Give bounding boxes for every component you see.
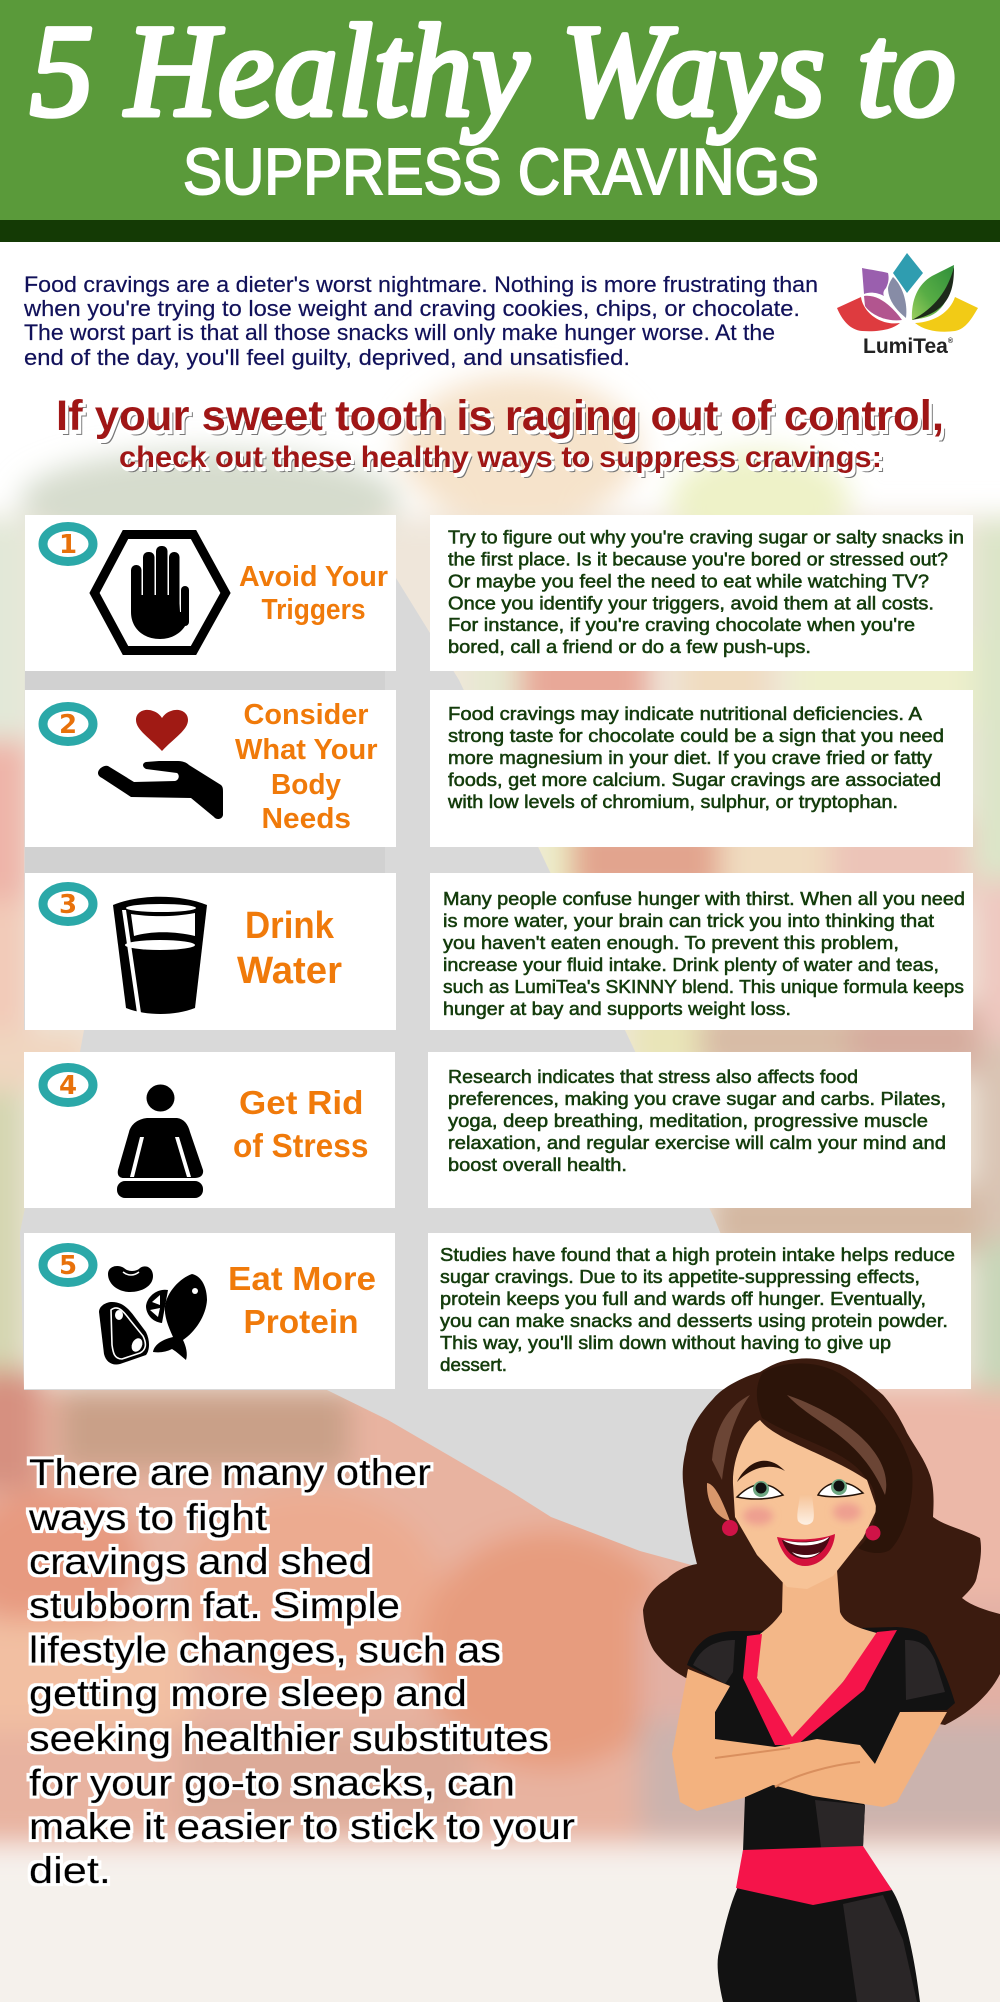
fringe bbox=[757, 1363, 913, 1553]
step 2 body text: with low levels of chromium, sulphur, or tryptophan. bbox=[447, 791, 898, 812]
arms bbox=[672, 1669, 947, 1811]
step 2 body text: more magnesium in your diet. If you crave fried or fatty bbox=[448, 747, 933, 768]
step 4 body text: boost overall health. bbox=[448, 1154, 627, 1175]
hair bbox=[643, 1358, 1000, 1725]
intro text: The worst part is that all those snacks will only make hunger worse. At the bbox=[24, 320, 775, 345]
step 1 number badge bbox=[43, 526, 93, 562]
closing paragraph: There are many other bbox=[29, 1451, 431, 1493]
mouth bbox=[777, 1534, 835, 1566]
step 3 number badge bbox=[43, 886, 93, 922]
closing paragraph: diet. bbox=[29, 1849, 111, 1891]
speech bubble: gray shape behind the cards bbox=[20, 578, 790, 1568]
ear bbox=[707, 1483, 730, 1521]
step 1 body text: Once you identify your triggers, avoid them at all costs. bbox=[448, 592, 934, 614]
step 1 title: Triggers bbox=[262, 594, 366, 626]
step 2 panel bbox=[25, 690, 973, 847]
closing paragraph: ways to fight bbox=[28, 1496, 268, 1538]
step 3 body text: is more water, your brain can trick you into thinking that bbox=[443, 910, 934, 931]
step 4 number badge bbox=[43, 1068, 93, 1102]
step 3 body text: you haven't eaten enough. To prevent this problem, bbox=[443, 932, 899, 953]
step 5 body text: you can make snacks and desserts using protein powder. bbox=[440, 1310, 948, 1331]
cheeks bbox=[743, 1503, 861, 1525]
step 2 body text: Food cravings may indicate nutritional deficiencies. A bbox=[448, 703, 923, 724]
step 4 panel bbox=[24, 1052, 971, 1208]
step 4 title: of Stress bbox=[233, 1127, 368, 1164]
step 2 body text: foods, get more calcium. Sugar cravings are associated bbox=[448, 769, 941, 790]
step 5 body text: This way, you'll slim down without having to give up bbox=[440, 1332, 891, 1353]
step 2 title: What Your bbox=[235, 734, 378, 766]
step 2 body text bbox=[447, 703, 944, 812]
step 4 body text: Research indicates that stress also affects food bbox=[448, 1066, 858, 1087]
step 4 body text: preferences, making you crave sugar and carbs. Pilates, bbox=[448, 1088, 946, 1109]
icon: stop hand in hexagon bbox=[94, 534, 226, 650]
step 4 body text: relaxation, and regular exercise will calm your mind and bbox=[448, 1132, 946, 1153]
step 2 body text: strong taste for chocolate could be a sign that you need bbox=[448, 725, 944, 746]
step 1 panel bbox=[25, 515, 973, 671]
step 5 body text: sugar cravings. Due to its appetite-suppressing effects, bbox=[440, 1266, 920, 1287]
step 1 body text: Try to figure out why you're craving sugar or salty snacks in bbox=[448, 526, 964, 548]
closing paragraph: make it easier to stick to your bbox=[29, 1805, 575, 1847]
step 4 body text: yoga, deep breathing, meditation, progressive muscle bbox=[448, 1110, 928, 1131]
closing paragraph: stubborn fat. Simple bbox=[29, 1584, 400, 1626]
step 1 body text: Or maybe you feel the need to eat while watching TV? bbox=[448, 570, 929, 592]
step 2 title bbox=[235, 699, 378, 835]
step 3 body text: increase your fluid intake. Drink plenty of water and teas, bbox=[443, 954, 939, 975]
logo wordmark: LumiTea bbox=[863, 335, 948, 358]
step 1 title bbox=[239, 561, 388, 626]
closing paragraph: seeking healthier substitutes bbox=[29, 1717, 549, 1759]
step 3 body text: Many people confuse hunger with thirst. When all you need bbox=[443, 888, 965, 909]
step 5 title: Eat More bbox=[228, 1260, 376, 1297]
step 1 body text: the first place. Is it because you're bored or stressed out? bbox=[448, 548, 948, 570]
intro text bbox=[23, 272, 818, 370]
dress highlights bbox=[693, 1640, 945, 2002]
step 5 body text bbox=[440, 1244, 955, 1375]
step 4 number badge: 4 bbox=[59, 1071, 77, 1101]
step 2 number badge bbox=[43, 706, 93, 742]
step 3 panel bbox=[25, 873, 973, 1030]
step 3 body text bbox=[443, 888, 965, 1019]
earrings bbox=[722, 1520, 738, 1536]
step 2 number badge: 2 bbox=[59, 710, 77, 740]
intro text: end of the day, you'll feel guilty, deprived, and unsatisfied. bbox=[24, 345, 630, 370]
step 4 title bbox=[233, 1084, 368, 1164]
face bbox=[733, 1420, 877, 1589]
step 5 body text: dessert. bbox=[440, 1354, 507, 1375]
icon: protein foods bbox=[99, 1266, 207, 1365]
logo wordmark: ® bbox=[948, 337, 954, 345]
title: script line: 5 Healthy Ways to bbox=[30, 0, 956, 144]
subtitle: SUPPRESS CRAVINGS bbox=[183, 135, 819, 208]
neck and chest bbox=[757, 1570, 880, 1740]
neckline trim bbox=[743, 1630, 897, 1745]
closing paragraph bbox=[28, 1451, 575, 1891]
intro text: when you're trying to lose weight and craving cookies, chips, or chocolate. bbox=[23, 296, 800, 321]
sub-heading: check out these healthy ways to suppress cravings: bbox=[119, 441, 882, 474]
step 5 number badge bbox=[43, 1248, 93, 1282]
belt bbox=[736, 1846, 892, 1905]
heading: sweet tooth: If your sweet tooth is raging out of control, bbox=[56, 392, 944, 440]
nose bbox=[797, 1494, 814, 1525]
illustration: woman with crossed arms bbox=[643, 1358, 1000, 2002]
step 1 body text: bored, call a friend or do a few push-ups. bbox=[448, 636, 811, 657]
step 1 number badge: 1 bbox=[59, 530, 77, 560]
step 2 title: Consider bbox=[244, 699, 368, 731]
dress bbox=[687, 1627, 955, 2002]
intro text: Food cravings are a dieter's worst nightmare. Nothing is more frustrating than bbox=[24, 272, 818, 297]
icon: meditating person bbox=[117, 1084, 203, 1198]
step 5 title bbox=[228, 1260, 376, 1340]
step 2 title: Body bbox=[271, 769, 341, 801]
step 3 title: Water bbox=[237, 950, 342, 992]
step 5 title: Protein bbox=[244, 1303, 358, 1340]
header banner bbox=[0, 0, 1000, 242]
logo: LumiTea bbox=[837, 253, 978, 358]
icon: heart over hand bbox=[98, 710, 223, 819]
step 3 body text: such as LumiTea's SKINNY blend. This unique formula keeps bbox=[443, 976, 964, 997]
step 5 body text: protein keeps you full and wards off hunger. Eventually, bbox=[440, 1288, 926, 1309]
step 3 title: Drink bbox=[245, 905, 335, 947]
step 1 title: Avoid Your bbox=[239, 561, 388, 593]
step 1 body text bbox=[448, 526, 964, 657]
step 4 title: Get Rid bbox=[239, 1084, 364, 1121]
step 3 number badge: 3 bbox=[59, 890, 77, 920]
step 3 body text: hunger at bay and supports weight loss. bbox=[443, 998, 791, 1019]
closing paragraph: getting more sleep and bbox=[29, 1672, 467, 1714]
step 5 panel bbox=[24, 1233, 971, 1389]
step 2 title: Needs bbox=[262, 803, 351, 835]
closing paragraph: lifestyle changes, such as bbox=[29, 1628, 501, 1670]
step 1 body text: For instance, if you're craving chocolate when you're bbox=[448, 614, 915, 635]
step 5 body text: Studies have found that a high protein intake helps reduce bbox=[440, 1244, 955, 1265]
closing paragraph: for your go-to snacks, can bbox=[29, 1762, 515, 1804]
step 4 body text bbox=[448, 1066, 946, 1175]
heading: sweet tooth bbox=[56, 392, 944, 474]
step 5 number badge: 5 bbox=[59, 1251, 77, 1281]
closing paragraph: cravings and shed bbox=[29, 1540, 372, 1582]
eyes and brow bbox=[737, 1461, 785, 1482]
icon: glass of water bbox=[113, 897, 207, 1014]
step 3 title bbox=[237, 905, 342, 992]
